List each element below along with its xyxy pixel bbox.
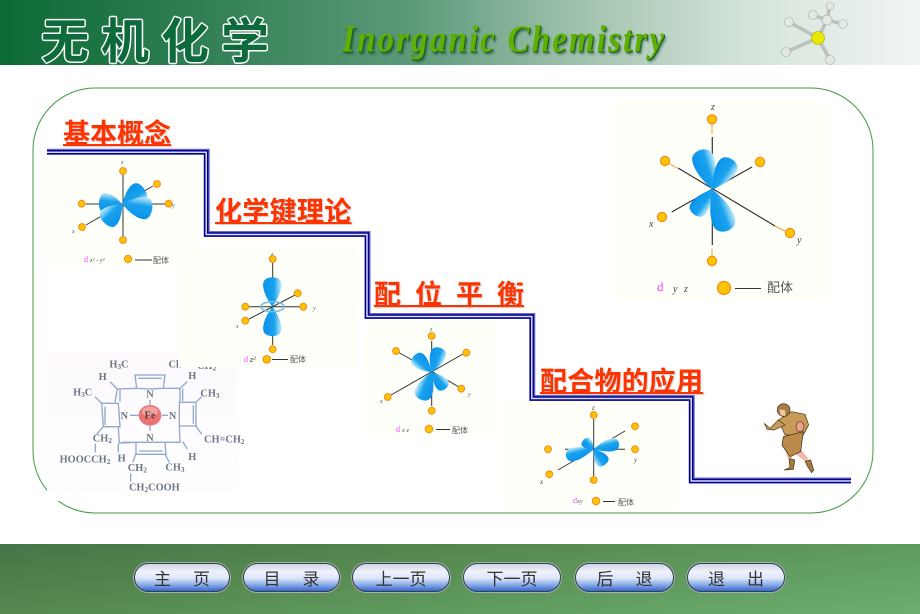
heme structure panel: CH [200,389,216,400]
heading: 配位平衡: 配位平衡 [374,280,524,310]
footer bar [0,544,920,614]
button: 目录: 录 [302,565,320,590]
heme structure panel: CH=CH [204,435,241,446]
orbital panel: d xz: d x z [396,425,410,434]
heme structure panel: H [188,452,196,463]
orbital panel: d z2 [178,248,358,367]
orbital panel: d xy: 配体 [618,497,634,508]
heme structure panel: H [118,454,126,465]
orbital panel: d yz (large): y [796,235,802,246]
heme structure panel: C [121,360,129,371]
heme structure panel: H [188,371,196,382]
orbital panel: d xz: y [467,392,471,398]
heme structure panel: 2 [107,457,111,466]
heme structure panel: 2 [213,363,217,372]
heme structure panel: H [109,360,117,371]
orbital panel: d xy: y [633,456,638,464]
iron atom [139,405,161,426]
heme structure panel: 3 [81,390,85,399]
orbital panel: d xy: x [539,478,544,486]
heading: 配合物的应用: 配合物的应用 [540,367,703,397]
heme structure panel: 2 [241,437,245,446]
button: 目录: 目 [264,565,280,590]
orbital panel: d z2: x [235,324,239,330]
orbital panel: d x2-y2: x [71,229,75,235]
orbital panel: d x2-y2: y [171,203,175,209]
heme structure panel: HOOCCH [60,455,107,466]
heading: 基本概念: 基本概念 [63,119,171,149]
heme structure panel: CH [165,463,181,474]
title: English: Inorganic Chemistry [342,19,666,61]
heme structure panel: CH [197,361,213,372]
heme structure panel: H [73,388,81,399]
staircase line [47,152,851,481]
heme structure panel: N [121,411,129,422]
orbital panel: d x2-y2: 配体 [153,255,169,266]
rounded frame [33,88,873,513]
orbital panel: d yz (large): y [672,284,678,295]
heme structure panel: CH [129,483,144,494]
orbital panel: d xz: x [379,399,383,405]
orbital panel: d xy [503,400,678,508]
heme structure panel: CH [128,463,143,474]
heme structure panel: C [85,388,92,399]
icon: molecule [781,2,848,65]
button: 主页: 主 [154,565,171,590]
button: 退出: 退 [708,565,725,590]
button: 主页 [134,563,230,592]
heme structure panel: 3 [117,362,121,371]
button: 上一页: 上一页 [376,565,426,590]
heme structure panel: CH [93,434,108,445]
orbital panel: d z2: y [312,306,316,312]
heme structure panel: N [146,390,154,401]
heme structure panel [47,352,245,501]
button: 主页: 页 [193,565,210,590]
orbital panel: d x2-y2 [47,156,200,267]
orbital panel: d x2-y2: d z² - y² [84,255,106,264]
orbital panel: d yz (large): z [710,102,715,113]
heme structure panel: Fe [145,411,156,422]
orbital panel: d xy: dxy [573,496,583,505]
heme structure panel: H [99,372,107,383]
heme structure panel: 2 [108,436,112,445]
orbital panel: d xz: 配体 [452,425,468,436]
button: 上一页 [352,563,450,592]
button: 退出 [687,563,785,592]
heme structure panel: 3 [181,465,185,474]
button: 目录 [243,563,340,592]
orbital panel: d z2: z [270,252,274,258]
button: 退出: 出 [747,565,764,590]
heme structure panel: N [146,433,154,444]
orbital panel: d z2: d z² [244,355,256,364]
heme structure panel: N [169,411,177,422]
runner figure [764,404,814,473]
orbital panel: d x2-y2: z [120,160,124,166]
orbital panel: d yz (large): x [648,219,654,230]
button: 下一页: 下一页 [486,565,538,590]
orbital panel: d z2: 配体 [290,354,306,365]
heme structure panel: 2 [143,465,147,474]
orbital panel: d xy: z [591,404,595,412]
heme structure panel: 2 [144,485,148,494]
heme structure panel: 3 [216,391,220,400]
orbital panel: d xz: z [429,327,433,333]
heme structure panel: COOH [148,483,180,494]
button: 后退: 退 [636,565,652,590]
orbital panel: d yz (large): d [657,279,664,294]
heading: 化学键理论: 化学键理论 [215,197,352,227]
orbital panel: d yz (large): z [683,284,688,295]
button: 下一页 [463,563,561,592]
header banner [0,0,920,65]
heme structure panel: Cl. [169,360,182,371]
orbital panel: d yz (large) [613,100,830,300]
orbital panel: d xz [365,322,498,436]
button: 后退: 后 [596,565,614,590]
button: 后退 [575,563,674,592]
orbital panel: d yz (large): 配体 [767,277,793,296]
